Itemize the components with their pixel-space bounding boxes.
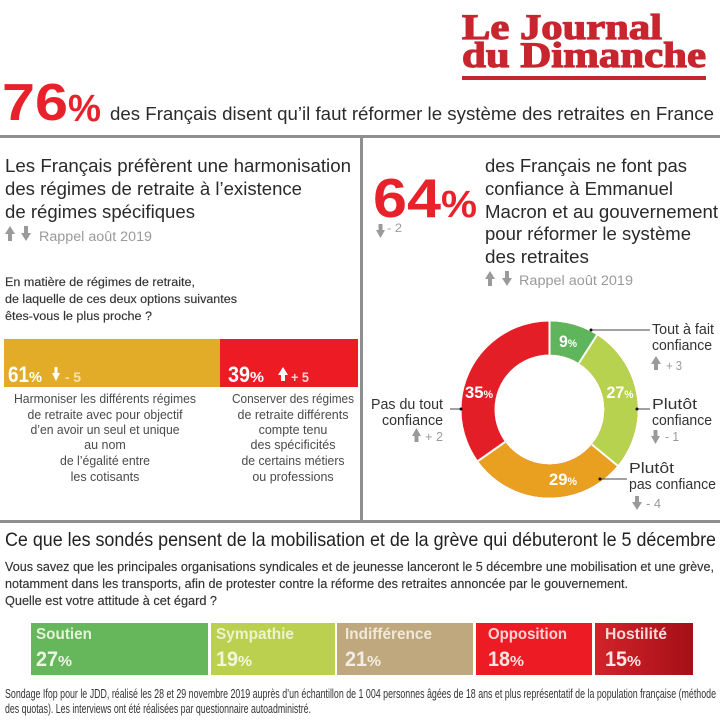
segment: hostilité 15%: Hostilité xyxy=(605,626,667,643)
segment: sympathie 19%: Sympathie xyxy=(216,626,294,643)
confiance statement: des retraites xyxy=(485,246,589,267)
callout: pas du tout confiance: confiance xyxy=(382,413,443,429)
callout: pas du tout confiance: Pas du tout xyxy=(371,397,443,413)
logo: Le Journal du Dimanche xyxy=(462,7,706,80)
callout: plutôt confiance: Plutôt xyxy=(652,396,698,413)
confiance statement: confiance à Emmanuel xyxy=(485,178,673,199)
callout: tout à fait confiance: + 3 xyxy=(666,358,682,373)
option text: conserver: de certains métiers xyxy=(242,454,344,468)
survey question: êtes-vous le plus proche ? xyxy=(5,311,152,323)
segment: sympathie 19%: % xyxy=(238,653,252,670)
segment: soutien 27%: Soutien xyxy=(36,626,92,643)
panel heading: Les Français préfèrent une harmonisation xyxy=(5,155,351,176)
stat: 64% xyxy=(373,167,477,238)
option text: harmoniser: de retraite avec pour objectif xyxy=(28,408,183,422)
confiance statement: pour réformer le système xyxy=(485,223,691,244)
segment: hostilité 15%: 15 xyxy=(605,648,627,671)
confiance statement xyxy=(485,155,718,267)
option text: conserver: des spécificités xyxy=(250,438,336,452)
option text: conserver: compte tenu xyxy=(259,423,327,437)
survey question: Vous savez que les principales organisations syndicales et de jeunesse lanceront le 5 décembre une mobilisation et une grève, xyxy=(5,560,714,574)
confiance statement: des Français ne font pas xyxy=(485,155,687,176)
survey question: Quelle est votre attitude à cet égard ? xyxy=(5,594,217,608)
rappel août 2019 legend xyxy=(5,226,152,244)
segment: opposition 18%: 18 xyxy=(488,648,510,671)
survey question: En matière de régimes de retraite, xyxy=(5,277,195,289)
segment: indifférence 21% xyxy=(337,623,473,675)
option text: conserver: ou professions xyxy=(252,470,334,484)
option text: harmoniser: d’en avoir un seul et unique xyxy=(30,423,180,437)
segment: hostilité 15% xyxy=(595,623,693,675)
bar: 61% harmoniser: - 5 xyxy=(65,369,81,385)
callout: plutôt pas confiance xyxy=(598,460,716,511)
segment: opposition 18% xyxy=(476,623,592,675)
segment: opposition 18%: % xyxy=(510,653,524,670)
callout: plutôt confiance xyxy=(636,396,712,444)
segment: indifférence 21%: % xyxy=(367,653,381,670)
segment: sympathie 19% xyxy=(211,623,335,675)
headline: 76%: des Français disent qu’il faut réformer le système des retraites en France xyxy=(110,103,714,124)
headline: 76%: 76 xyxy=(2,74,68,132)
rappel août 2019 legend xyxy=(485,271,633,288)
survey question xyxy=(5,560,714,608)
rappel août 2019 legend: Rappel août 2019 xyxy=(519,273,633,288)
headline: 76% xyxy=(2,74,714,132)
panel heading: de régimes spécifiques xyxy=(5,201,195,222)
donut chart xyxy=(465,321,634,489)
segment: soutien 27% xyxy=(31,623,208,675)
bar: 61% harmoniser: 61 xyxy=(8,362,29,387)
callout: plutôt pas confiance: Plutôt xyxy=(629,460,675,477)
panel: régimes de retraite xyxy=(4,155,358,484)
callout: plutôt confiance: confiance xyxy=(652,413,712,429)
stat: 64%: - 2 xyxy=(387,221,402,235)
option text: conserver xyxy=(232,392,354,484)
segment: soutien 27%: % xyxy=(58,653,72,670)
donut chart: 27% xyxy=(606,383,634,402)
logo: Le Journal du Dimanche: Le Journal xyxy=(462,7,662,47)
confiance statement: Macron et au gouvernement xyxy=(485,201,718,222)
callout: pas du tout confiance: + 2 xyxy=(425,429,443,444)
callout: pas du tout confiance xyxy=(371,397,462,444)
option text: harmoniser: au nom xyxy=(84,438,126,452)
survey question: notamment dans les transports, afin de protester contre la réforme des retraites annoncée par le gouvernement. xyxy=(5,577,628,591)
callout: tout à fait confiance: Tout à fait xyxy=(652,322,714,338)
bar: 39% conserver: 39 xyxy=(228,362,250,387)
segment: sympathie 19%: 19 xyxy=(216,648,238,671)
callout: plutôt confiance: - 1 xyxy=(665,429,679,444)
panel heading xyxy=(5,155,351,222)
callout: plutôt pas confiance: pas confiance xyxy=(629,477,716,493)
bar: 39% conserver xyxy=(220,339,358,387)
option text: conserver: Conserver des régimes xyxy=(232,392,354,406)
segment: soutien 27%: 27 xyxy=(36,648,58,671)
survey question: de laquelle de ces deux options suivantes xyxy=(5,294,237,306)
segment: indifférence 21%: 21 xyxy=(345,648,367,671)
bar: 61% harmoniser xyxy=(4,339,220,387)
survey question xyxy=(5,277,237,323)
panel heading: des régimes de retraite à l’existence xyxy=(5,178,302,199)
rappel août 2019 legend: Rappel août 2019 xyxy=(39,229,152,244)
stat: 64%: 64 xyxy=(373,167,441,229)
logo: Le Journal du Dimanche: du Dimanche xyxy=(462,35,706,75)
callout: tout à fait confiance: confiance xyxy=(652,338,712,354)
bar: 61% harmoniser: % xyxy=(29,369,42,386)
source note: des quotas). Les interviews ont été réalisées par questionnaire autoadministré. xyxy=(5,702,311,716)
option text: conserver: de retraite différents xyxy=(238,408,348,422)
section dividers xyxy=(0,135,720,523)
option text: harmoniser: Harmoniser les différents régimes xyxy=(14,392,196,406)
callout: tout à fait confiance xyxy=(590,322,714,373)
option text: harmoniser xyxy=(14,392,196,484)
option text: harmoniser: de l’égalité entre xyxy=(60,454,150,468)
segment: hostilité 15%: % xyxy=(627,653,641,670)
callout: plutôt pas confiance: - 4 xyxy=(646,496,661,511)
segment: indifférence 21%: Indifférence xyxy=(345,626,432,643)
bar: 39% conserver: + 5 xyxy=(291,369,309,385)
segment: opposition 18%: Opposition xyxy=(488,626,567,643)
bar: 39% conserver: % xyxy=(250,369,264,386)
panel: mobilisation xyxy=(5,529,716,675)
headline: 76%: % xyxy=(68,88,101,130)
panel: confiance xyxy=(371,155,718,511)
option text: harmoniser: les cotisants xyxy=(71,470,139,484)
donut chart: 29% xyxy=(549,470,577,489)
stat: 64%: % xyxy=(441,184,477,226)
donut chart: 35% xyxy=(465,383,493,402)
donut chart: 9% xyxy=(559,332,577,351)
source note xyxy=(5,687,716,716)
